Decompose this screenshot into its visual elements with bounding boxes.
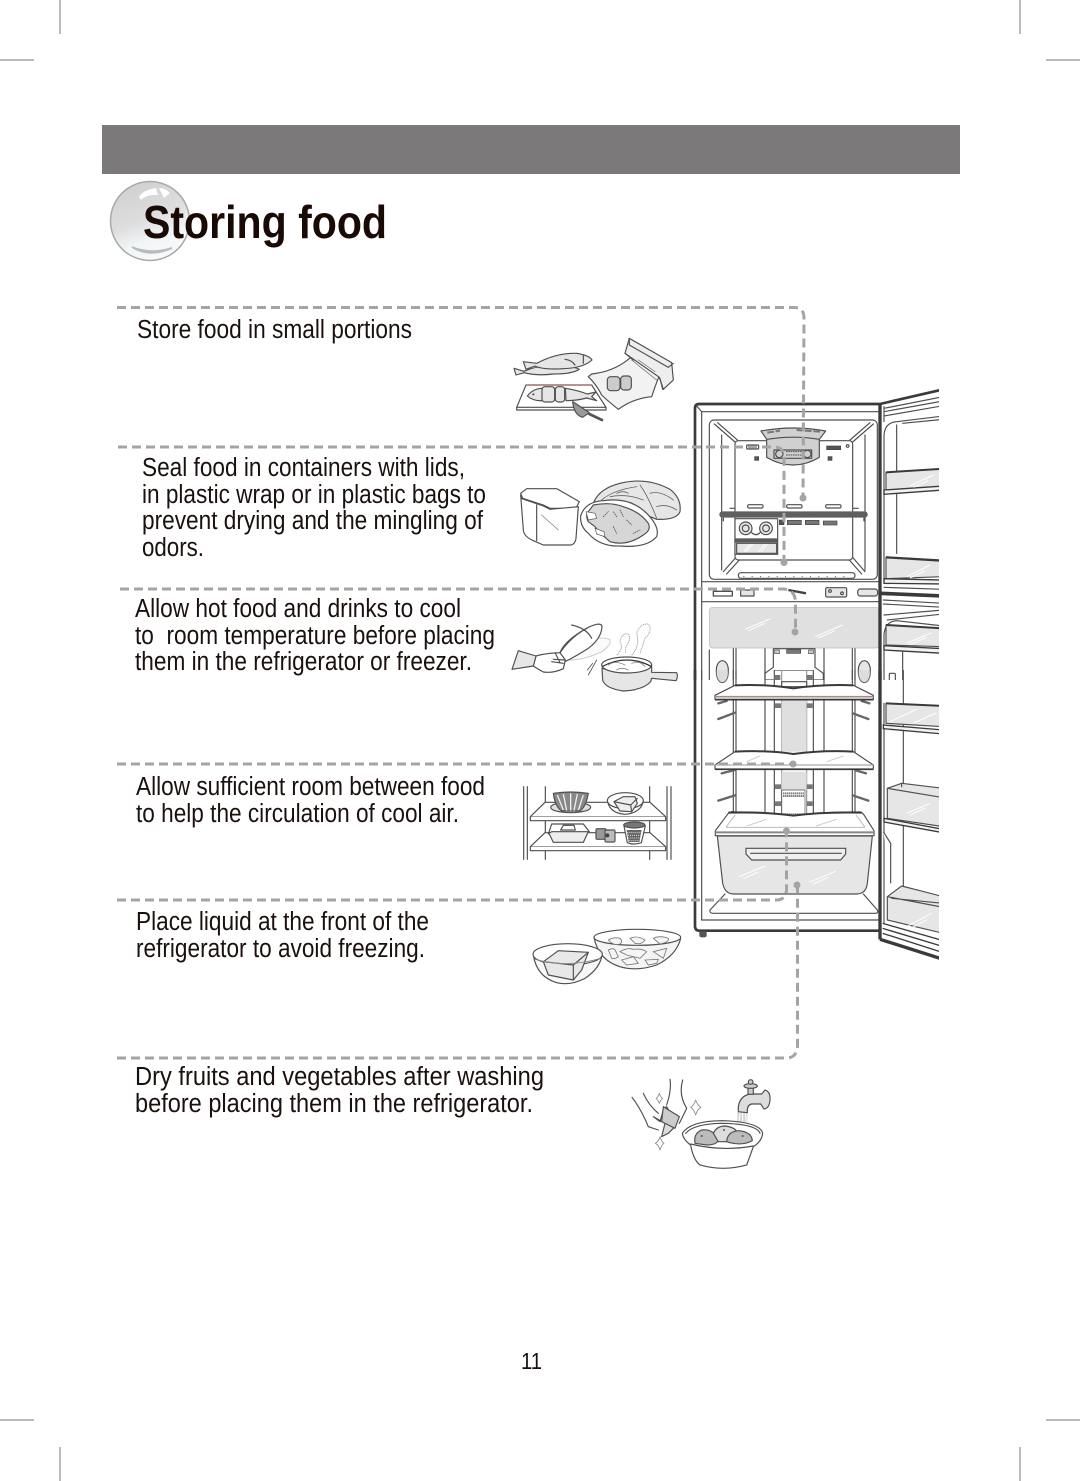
refrigerator door upper [880, 389, 943, 683]
step 6: dry fruits and vegetables [135, 1063, 770, 1168]
dashed connector lines [117, 308, 806, 1058]
crisper drawer [710, 812, 878, 913]
text: before placing them in the refrigerator. [135, 1090, 533, 1118]
page number: 11 [521, 1348, 542, 1374]
step 3: cool hot food [135, 595, 677, 691]
icon: glass orb [110, 182, 190, 260]
illustration: open refrigerator lower part [695, 663, 943, 959]
text: to help the circulation of cool air. [136, 800, 459, 828]
text: Store food in small portions [137, 316, 412, 344]
text: Seal food in containers with lids, [142, 454, 465, 482]
text [142, 454, 486, 562]
text: Place liquid at the front of the [136, 908, 429, 936]
text: prevent drying and the mingling of [142, 507, 484, 535]
shelf 2 [715, 751, 873, 769]
step 2: seal food in containers [142, 454, 680, 562]
icon: fish and wrap [514, 338, 673, 420]
text: odors. [142, 534, 204, 562]
illustration: open refrigerator upper part [695, 389, 943, 683]
icon: container and wrapped meat [521, 481, 680, 546]
icon: two bowls [533, 929, 681, 984]
text: refrigerator to avoid freezing. [136, 935, 425, 963]
refrigerator door lower [880, 670, 943, 959]
text: in plastic wrap or in plastic bags to [142, 481, 486, 509]
refrigerator fridge compartment [695, 663, 880, 937]
text [136, 773, 485, 828]
refrigerator freezer compartment [695, 404, 880, 680]
step 1: store food in small portions [137, 316, 673, 420]
text: Allow sufficient room between food [136, 773, 485, 801]
step 5: place liquid at the front [136, 908, 681, 984]
icon: shelves with food [524, 787, 671, 859]
title text: Storing food [143, 196, 387, 248]
icon: washing produce under faucet [632, 1079, 770, 1168]
text [136, 908, 429, 963]
text: to room temperature before placing [135, 622, 495, 650]
icon: fan and steaming pot [512, 624, 677, 691]
text [135, 1063, 544, 1118]
shelf 1 [715, 685, 873, 700]
header bar [102, 125, 960, 174]
text: Dry fruits and vegetables after washing [135, 1063, 544, 1091]
text [135, 595, 495, 676]
text: them in the refrigerator or freezer. [135, 648, 472, 676]
title with glass orb [110, 182, 387, 260]
step 4: allow room between food [136, 773, 671, 859]
text: Allow hot food and drinks to cool [135, 595, 461, 623]
